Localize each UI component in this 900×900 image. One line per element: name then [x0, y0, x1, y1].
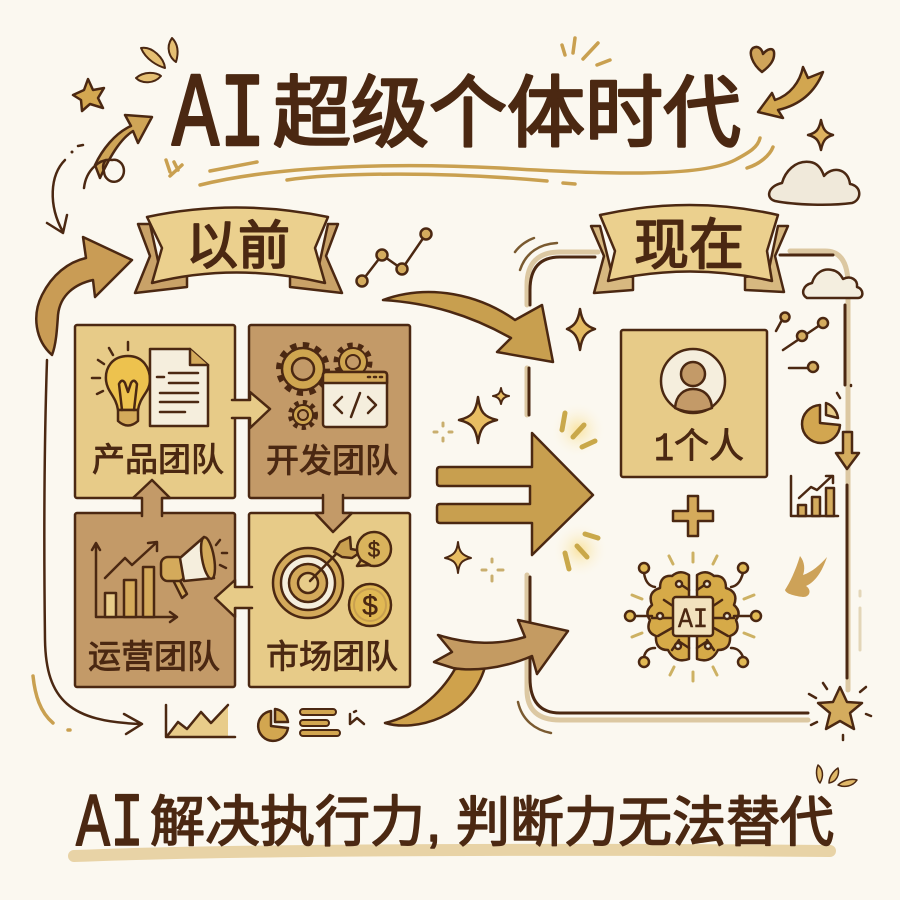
icon: mini pie chart — [258, 709, 288, 741]
icon: megaphone — [161, 536, 227, 598]
footer caption: AI — [76, 782, 144, 868]
icon: code window — [323, 372, 387, 427]
footer underline — [74, 850, 830, 856]
tile: market team — [249, 513, 410, 687]
icon: right dashes — [858, 591, 862, 650]
label: development team: 开发团队 — [266, 442, 398, 479]
icon: decorative petals — [136, 38, 178, 82]
icon: dollar speech bubble: $ — [368, 537, 380, 562]
icon: sparkle top right — [808, 120, 833, 150]
arrow: thin curved down arrow — [47, 145, 83, 233]
ribbon: before — [135, 208, 342, 293]
title: 超级个体时代 — [273, 69, 741, 157]
icon: frame star — [809, 683, 871, 740]
icon: swallow — [785, 556, 827, 597]
icon: dollar speech bubble — [357, 532, 391, 566]
arrow: small gold arrow with loop — [84, 115, 152, 188]
label: AI chip: AI — [678, 605, 708, 636]
icon: person avatar — [661, 349, 725, 413]
footer caption: 解决执行力 — [150, 791, 425, 853]
icon: sparkle near frame — [567, 309, 595, 350]
panel: team puzzle — [75, 325, 410, 687]
label: one person: 1 — [654, 428, 674, 473]
label: one person — [654, 427, 744, 473]
icon: star top left — [73, 79, 104, 111]
connector: market to ops — [215, 580, 252, 617]
icon: cloud top right — [769, 162, 859, 205]
icon: network nodes — [776, 312, 828, 372]
heading: before: 以前 — [186, 218, 290, 276]
icon: coin — [349, 584, 391, 626]
heading: now: 现在 — [634, 214, 744, 276]
connector: dev to market — [315, 495, 352, 532]
footer caption: , — [426, 791, 441, 853]
icon: coin: $ — [362, 590, 378, 621]
icon: light bulb — [92, 342, 150, 426]
icon: footer petals — [817, 765, 857, 786]
label: market team: 市场团队 — [266, 638, 398, 675]
icon: mini area chart — [166, 705, 235, 737]
arrow: small down arrow right — [836, 432, 859, 469]
title — [172, 57, 741, 177]
icon: growth chart — [92, 542, 177, 622]
arrow: long left loop — [33, 360, 142, 734]
icon: plus — [673, 496, 713, 536]
icon: glow ticks — [550, 402, 608, 578]
panel: one person — [621, 330, 767, 477]
label: operations team: 运营团队 — [88, 638, 220, 675]
arrow: large curved arrow to ribbon — [36, 237, 132, 355]
icon: line chart near ribbon — [356, 228, 432, 286]
icon: pie chart right — [802, 385, 851, 443]
title underline — [166, 138, 773, 185]
connector: product to dev — [232, 392, 270, 428]
arrow: top right gold arrow — [758, 67, 823, 118]
icon: heart — [751, 47, 774, 72]
arrow: big central arrow — [437, 433, 593, 555]
footer caption: 判断力无法替代 — [456, 793, 834, 853]
arrow: curved arrow into now panel — [383, 292, 553, 362]
icon: squiggle — [350, 711, 364, 724]
icon: sparkles between panels — [445, 388, 509, 573]
icon: mini list — [300, 709, 340, 736]
icon: top ticks — [562, 38, 610, 65]
footer caption — [76, 782, 834, 868]
arrow: lower curved arrow into now panel — [385, 620, 568, 726]
ribbon: now — [591, 205, 788, 293]
icon: AI brain — [625, 553, 761, 681]
label: one person: 个人 — [674, 427, 744, 466]
icon: target — [273, 537, 362, 618]
tile: operations team — [75, 513, 235, 687]
icon: cloud right — [803, 270, 862, 298]
panel: now frame — [515, 238, 848, 733]
icon: small bar chart right — [791, 476, 838, 516]
icon: document — [150, 349, 208, 426]
tile: development team — [249, 325, 410, 498]
title: AI — [172, 57, 266, 177]
tile: product team — [75, 325, 235, 498]
icon: small twinkles — [434, 423, 503, 581]
label: product team: 产品团队 — [92, 441, 224, 478]
icon: gears — [280, 346, 369, 427]
connector: ops to product — [133, 480, 170, 516]
